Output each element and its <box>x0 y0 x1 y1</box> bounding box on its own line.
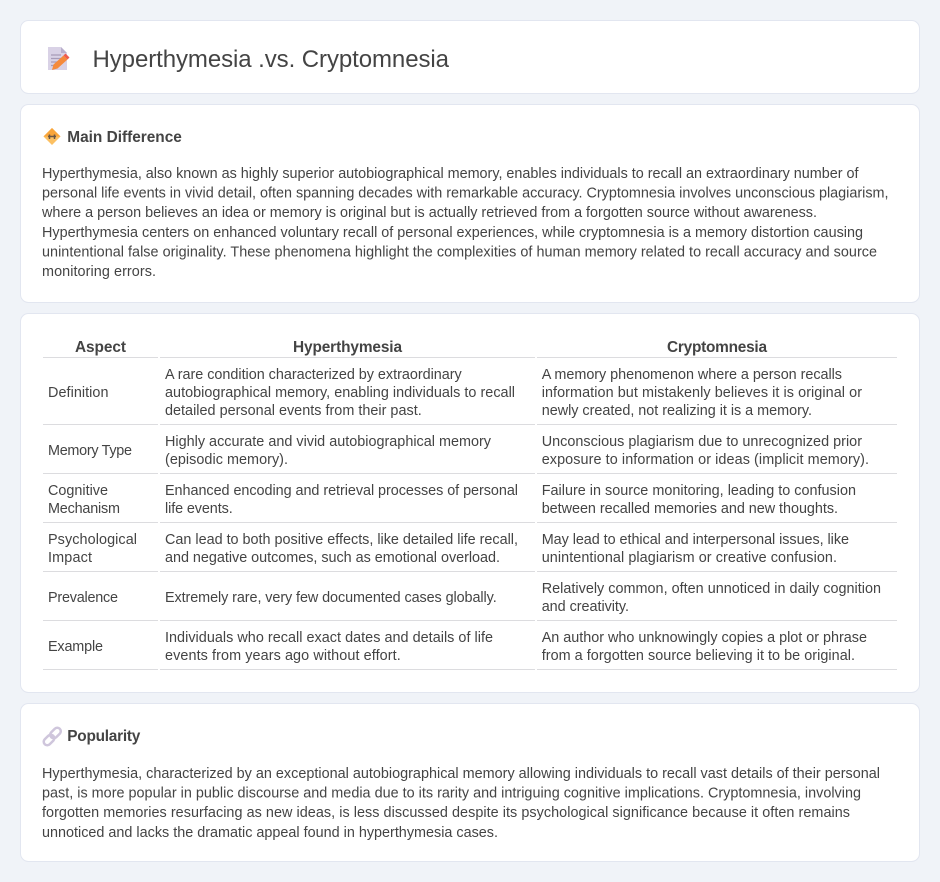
table row: definition: Definition <box>48 385 108 401</box>
text block: main difference paragraph: personal life events in vivid detail, often spanning decades with remarkable accuracy. Cryptomnesia involves unconscious plagiarism, <box>42 186 888 202</box>
table row: psychological impact: Psychological <box>48 532 137 548</box>
text block: main difference paragraph: Hyperthymesia, also known as highly superior autobiographical memory, enables individuals to recall an extraordinary number of <box>42 166 860 182</box>
table header row: Aspect <box>75 339 126 356</box>
table row: cognitive mechanism: between recalled memories and new thoughts. <box>542 501 838 517</box>
table row: prevalence: Prevalence <box>48 590 118 606</box>
table row: memory type <box>43 434 897 474</box>
table row: prevalence <box>43 581 897 621</box>
title: Hyperthymesia .vs. Cryptomnesia <box>92 46 450 73</box>
table row: example: An author who unknowingly copies a plot or phrase <box>542 630 867 646</box>
table row: example: from a forgotten source believing it to be original. <box>542 648 855 664</box>
table row: definition <box>43 367 897 425</box>
table row: memory type: Memory Type <box>48 443 132 459</box>
table header row <box>43 339 897 358</box>
table row: prevalence: Relatively common, often unnoticed in daily cognition <box>542 581 881 597</box>
table header row: Hyperthymesia <box>293 339 402 356</box>
table row: definition: A memory phenomenon where a person recalls <box>542 367 842 383</box>
table header row: Cryptomnesia <box>667 339 767 356</box>
table row: example: Example <box>48 639 103 655</box>
text block: popularity paragraph: unnoticed and lacks the dramatic appeal found in hyperthymesia cases. <box>42 825 498 841</box>
panel: comparison table <box>20 314 920 692</box>
table row: cognitive mechanism: Failure in source monitoring, leading to confusion <box>542 483 856 499</box>
table row: memory type: Highly accurate and vivid autobiographical memory <box>165 434 492 450</box>
table row: prevalence: Extremely rare, very few documented cases globally. <box>165 590 497 606</box>
table row: definition: autobiographical memory, enabling individuals to recall <box>165 385 515 401</box>
heading: main difference: Main Difference <box>67 129 182 146</box>
table row: prevalence: and creativity. <box>542 599 629 615</box>
table row: example <box>43 630 897 670</box>
text block: popularity paragraph <box>42 766 880 841</box>
table row: psychological impact: May lead to ethical and interpersonal issues, like <box>542 532 849 548</box>
table row: definition: information but mistakenly believes it is original or <box>542 385 862 401</box>
icon: orange diamond sign <box>44 128 60 145</box>
panel: title card <box>20 20 920 94</box>
text block: main difference paragraph: monitoring errors. <box>42 264 156 280</box>
table row: psychological impact: Impact <box>48 550 92 566</box>
text block: main difference paragraph: where a person believes an idea or memory is original but is actually retrieved from a forgotten source without awareness. <box>41 205 817 221</box>
table row: psychological impact: Can lead to both positive effects, like detailed life recall, <box>165 532 518 548</box>
table row: cognitive mechanism: Cognitive <box>48 483 108 499</box>
table row: definition: newly created, not realizing it is a memory. <box>542 403 812 419</box>
table row: psychological impact: and negative outcomes, such as emotional overload. <box>165 550 500 566</box>
table row: cognitive mechanism: Mechanism <box>48 501 120 517</box>
table row: cognitive mechanism: Enhanced encoding and retrieval processes of personal <box>165 483 518 499</box>
icon: document with pencil <box>48 47 70 70</box>
text block: main difference paragraph: unintentional false originality. These phenomena highlight the complexities of human memory related to recall accuracy and source <box>42 244 877 260</box>
heading: popularity: Popularity <box>67 728 141 745</box>
table row: memory type: exposure to information or ideas (implicit memory). <box>542 452 869 468</box>
table row: cognitive mechanism: life events. <box>165 501 233 517</box>
table row: psychological impact: unintentional plagiarism or creative confusion. <box>542 550 837 566</box>
text block: main difference paragraph <box>41 166 888 280</box>
table row: cognitive mechanism <box>43 483 897 523</box>
table row: psychological impact <box>43 532 897 572</box>
table row: example: events from years ago without effort. <box>165 648 401 664</box>
table row: definition: detailed personal events from their past. <box>165 403 422 419</box>
panel: popularity <box>20 704 920 862</box>
text block: main difference paragraph: Hyperthymesia centers on enhanced voluntary recall of personal experiences, while cryptomnesia is a memory distortion causing <box>42 225 863 241</box>
text block: popularity paragraph: forgotten memories resurfacing as new ideas, is less discussed despite its psychological significance because it often remains <box>42 805 850 821</box>
panel: main difference <box>20 104 920 302</box>
table row: example: Individuals who recall exact dates and details of life <box>165 630 493 646</box>
icon: chain link <box>42 726 62 747</box>
text block: popularity paragraph: past, is more popular in public discourse and media due to its rarity and intriguing cognitive implications. Cryptomnesia, involving <box>42 786 861 802</box>
table row: memory type: (episodic memory). <box>165 452 288 468</box>
table row: memory type: Unconscious plagiarism due to unrecognized prior <box>542 434 862 450</box>
table row: definition: A rare condition characterized by extraordinary <box>165 367 462 383</box>
text block: popularity paragraph: Hyperthymesia, characterized by an exceptional autobiographical memory allowing individuals to recall vast details of their personal <box>42 766 880 782</box>
